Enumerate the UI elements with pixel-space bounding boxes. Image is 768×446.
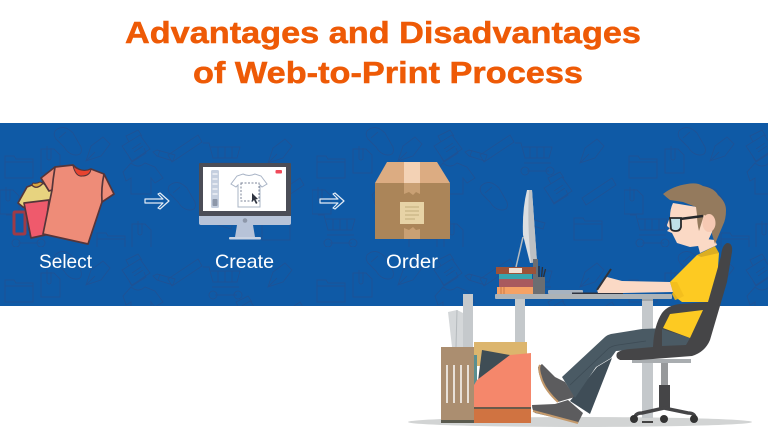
pen bbox=[597, 269, 611, 290]
illustration: man at desk bbox=[532, 183, 732, 423]
floor shadow bbox=[408, 417, 752, 427]
arm and hand bbox=[597, 277, 673, 293]
panel: blue banner bbox=[0, 123, 768, 306]
glasses bbox=[670, 216, 703, 231]
trouser hip in chair bbox=[662, 329, 690, 346]
arrow: create to order bbox=[320, 193, 344, 209]
illustration: monitor side view bbox=[516, 190, 538, 277]
label: Create: Create bbox=[215, 251, 274, 273]
illustration: rolled paper and basket bbox=[441, 294, 474, 423]
arrow: select to create bbox=[145, 193, 169, 209]
ear bbox=[702, 214, 716, 232]
shirt bbox=[670, 253, 719, 302]
illustration: stack of books bbox=[496, 267, 538, 294]
trousers lower leg bbox=[570, 358, 612, 414]
chair seat and back bbox=[616, 243, 732, 360]
illustration: desk bbox=[495, 294, 672, 423]
illustration: pen cup bbox=[533, 266, 546, 294]
label: Order: Order bbox=[386, 251, 439, 273]
illustration: magazine box bbox=[474, 342, 531, 423]
shirt patch in chair bbox=[663, 310, 703, 338]
face bbox=[667, 203, 713, 247]
label: Select: Select bbox=[39, 251, 93, 273]
title bbox=[125, 16, 641, 90]
icon: monitor with t-shirt designer bbox=[199, 163, 291, 240]
hair bbox=[663, 183, 726, 244]
title: of Web-to-Print Process bbox=[193, 56, 583, 90]
sleeve shading bbox=[670, 282, 684, 299]
chair base bbox=[630, 359, 698, 423]
icon: shirts and mug bbox=[14, 165, 114, 244]
trousers upper leg bbox=[562, 328, 690, 398]
icon: cardboard box bbox=[375, 162, 450, 239]
title: Advantages and Disadvantages bbox=[125, 16, 641, 50]
back shoe bbox=[538, 364, 575, 402]
illustration: keyboard and tablet bbox=[548, 290, 623, 294]
front shoe bbox=[532, 400, 583, 423]
neck bbox=[696, 238, 717, 253]
